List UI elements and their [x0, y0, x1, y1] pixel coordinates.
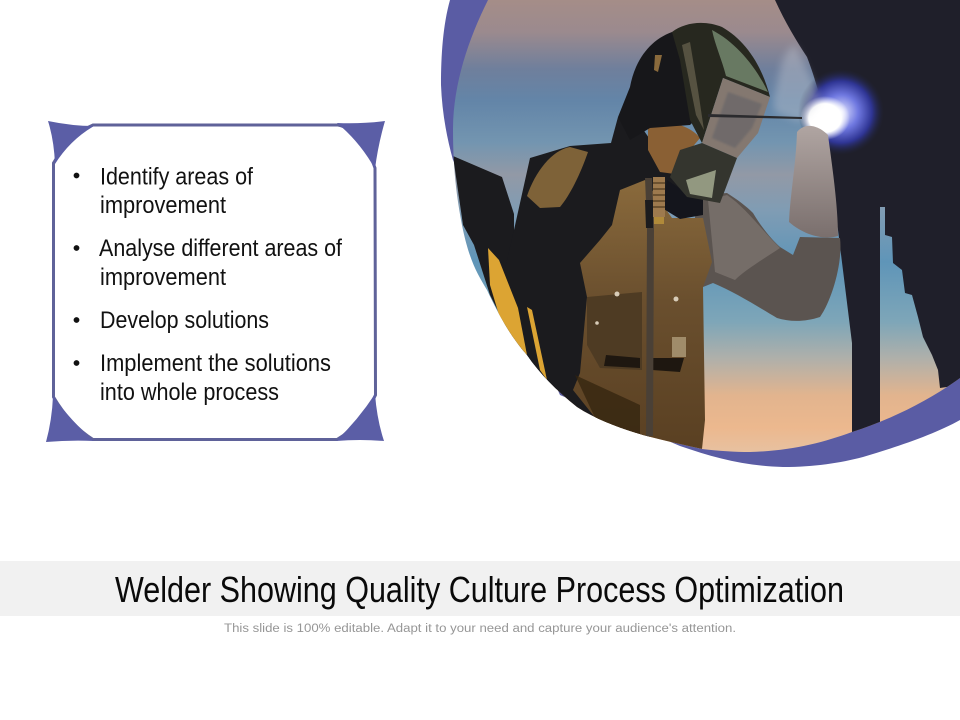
- smoke: [773, 45, 820, 122]
- overalls: [573, 180, 712, 449]
- visor: [702, 78, 770, 158]
- photo: welder: [440, 0, 960, 460]
- bullet list: improvement: [100, 192, 226, 219]
- cable coil: [653, 177, 665, 224]
- bullet list: into whole process: [100, 379, 279, 406]
- lower mask: [670, 143, 737, 203]
- torch cable: [645, 178, 654, 436]
- bullet list: [74, 164, 342, 406]
- neck hollow: [665, 191, 703, 219]
- corner: top right: [337, 121, 385, 169]
- corner: top left: [48, 121, 94, 164]
- cable shadow: [645, 200, 653, 228]
- helmet streak: [682, 42, 704, 130]
- dark wall top right: [775, 0, 960, 440]
- bullet list: improvement: [100, 264, 226, 291]
- visor inner: [712, 92, 762, 148]
- title: Welder Showing Quality Culture Process Optimization: [115, 569, 844, 610]
- hood: [618, 32, 692, 132]
- title band: [0, 561, 960, 616]
- left dark box: [453, 156, 560, 400]
- glove: [789, 126, 838, 237]
- jacket sleeve: [527, 147, 588, 208]
- arm highlight: [708, 195, 780, 280]
- corner: bottom left: [46, 396, 94, 442]
- pocket shadow: [604, 355, 684, 372]
- welding glow: [800, 72, 882, 152]
- helmet reflection: [712, 30, 768, 92]
- bullet list: Develop solutions: [100, 307, 269, 334]
- bullet list: Analyse different areas of: [99, 235, 342, 262]
- overall pocket: [587, 292, 642, 370]
- bullet list: Implement the solutions: [100, 350, 331, 377]
- panel: rounded white box: [54, 125, 376, 440]
- sky: [440, 0, 960, 460]
- glove on torch: [648, 122, 700, 175]
- helmet dome: [672, 23, 770, 143]
- subtitle: This slide is 100% editable. Adapt it to your need and capture your audience's attention.: [224, 623, 736, 635]
- bullet list: Identify areas of: [100, 164, 253, 190]
- grey arm: [690, 193, 840, 321]
- hood detail: [654, 55, 662, 72]
- text panel: [46, 121, 385, 442]
- button details: [595, 292, 686, 357]
- dark torso: [514, 117, 680, 437]
- mask highlight: [686, 170, 716, 198]
- yellow strips: [488, 248, 547, 380]
- corner: bottom right: [336, 394, 384, 441]
- welding rod: [708, 114, 802, 119]
- purple crescent behind photo: [441, 0, 960, 467]
- overall lower shadow: [575, 375, 640, 438]
